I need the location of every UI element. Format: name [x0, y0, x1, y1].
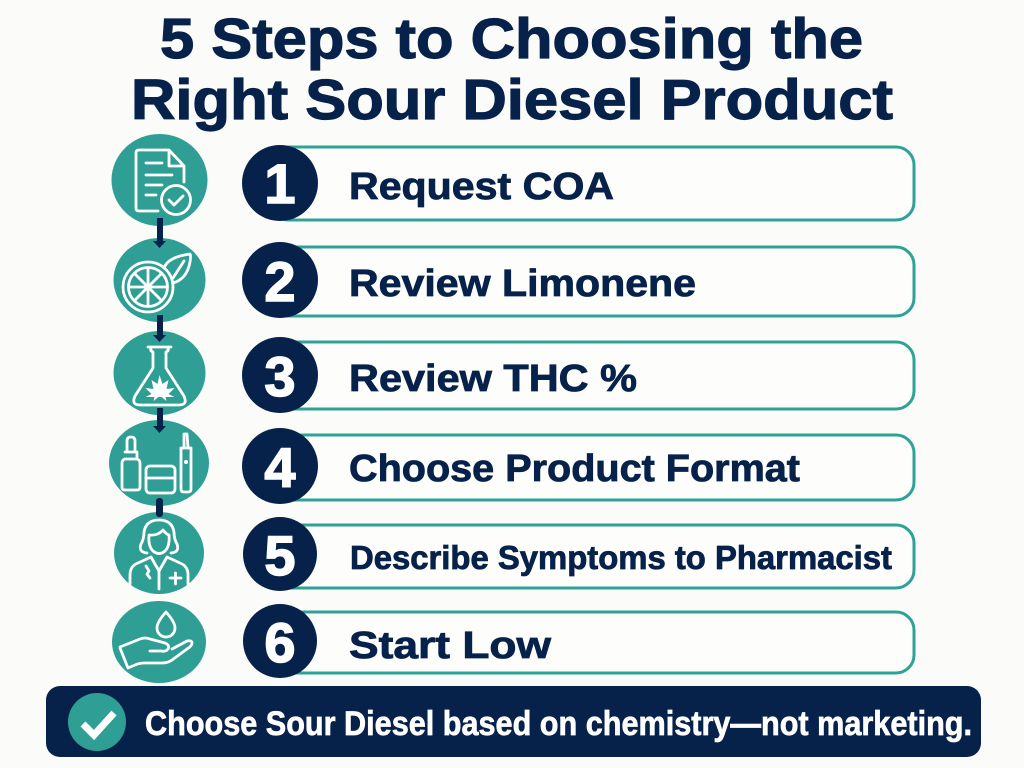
step 3: icon flask with leaf: [114, 331, 206, 415]
pill: [270, 612, 914, 673]
step 4 row: [242, 428, 914, 504]
number badge: 6: [264, 611, 296, 674]
step 6 row: [243, 604, 914, 678]
step 1 row: [242, 145, 914, 221]
label: Describe Symptoms to Pharmacist: [350, 539, 892, 576]
step 6: icon hand with drop: [112, 601, 206, 683]
arrow: step 2 to 3: [153, 315, 166, 342]
pill: [270, 147, 914, 220]
label: Review THC %: [349, 358, 637, 400]
arrow: step 3 to 4: [153, 408, 166, 433]
number badge: [242, 337, 318, 413]
number badge: 3: [264, 345, 296, 408]
number badge: [242, 242, 318, 318]
number badge: 1: [264, 152, 296, 215]
number badge: 2: [264, 250, 296, 313]
callout bar: [46, 686, 981, 757]
number badge: [242, 428, 318, 504]
number badge: 4: [264, 436, 296, 499]
title: 5 Steps to Choosing the: [160, 7, 863, 71]
label: Start Low: [349, 625, 552, 667]
number badge: 5: [264, 524, 296, 587]
label: Choose Product Format: [349, 448, 800, 490]
number badge: [243, 604, 317, 678]
pill: [270, 247, 914, 316]
pill: [270, 342, 914, 409]
title: [131, 7, 893, 132]
step 5 row: [243, 517, 914, 591]
connector: step 4 to 5: [156, 498, 163, 517]
number badge: [243, 517, 317, 591]
arrow: step 1 to 2: [153, 218, 166, 248]
icon: check badge: [68, 693, 126, 751]
step 3 row: [242, 337, 914, 413]
title: Right Sour Diesel Product: [131, 68, 893, 132]
step 1: icon document with check: [112, 134, 208, 226]
step 2: icon citrus and leaf: [114, 238, 206, 322]
pill: [270, 435, 914, 500]
step 2 row: [242, 242, 914, 318]
pill: [270, 525, 914, 588]
number badge: [242, 145, 318, 221]
label: Review Limonene: [349, 263, 696, 305]
step 4: icon product formats: [109, 420, 209, 506]
label: Request COA: [349, 166, 614, 208]
step 5: icon pharmacist: [114, 512, 204, 594]
